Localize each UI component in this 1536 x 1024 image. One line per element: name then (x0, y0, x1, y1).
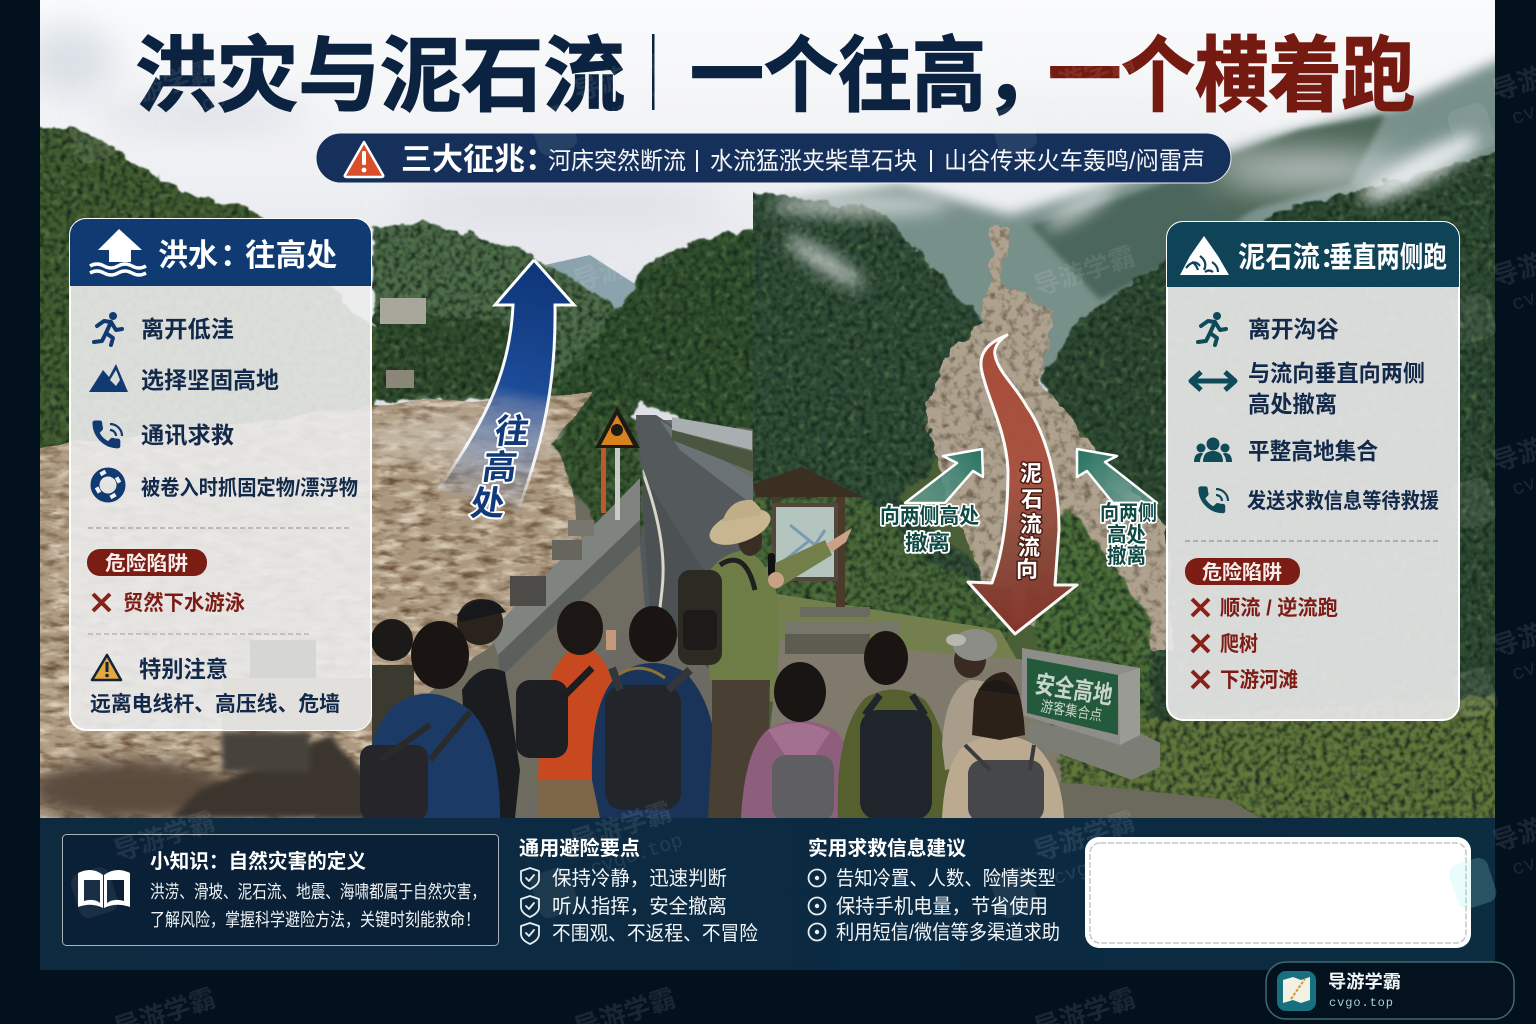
warning banner: ： (525, 142, 556, 177)
pill: danger traps (87, 549, 207, 576)
rescue info tips: 告知冷置、人数、险情类型 (836, 867, 1056, 890)
title: 一个往高 (690, 31, 986, 122)
person with cap black jacket (457, 599, 520, 818)
list item: choose solid high ground (89, 364, 279, 393)
title: 一个横着跑 (1048, 31, 1415, 122)
person purple hoodie (741, 662, 855, 821)
watermarks: cvgo.top (1051, 80, 1149, 131)
list item: leave gully (1198, 313, 1339, 345)
trap item: downstream beach: 下游河滩 (1220, 669, 1298, 692)
list item: leave gully: 离开沟谷 (1248, 316, 1339, 342)
person blue hoodie (360, 621, 500, 820)
arrow text: 高处 (1107, 523, 1146, 547)
knowledge box: 洪涝、滑坡、泥石流、地震、海啸都属于自然灾害， (150, 882, 486, 902)
arrow text (1100, 502, 1157, 568)
general safety tips: 通用避险要点 (519, 836, 640, 860)
knowledge box: 小知识：自然灾害的定义 (150, 849, 366, 873)
green arrow: evacuate left (880, 449, 983, 555)
arrow label: 往 (492, 413, 532, 451)
pill: danger traps (1185, 558, 1300, 585)
panel heading: 垂直两侧跑 (1329, 241, 1447, 274)
watermarks: 导游学霸 (1030, 241, 1138, 302)
list item: perpendicular: 高处撤离 (1248, 391, 1337, 417)
panel heading (1238, 241, 1447, 274)
arrow text: 向两侧 (1100, 502, 1157, 525)
list item: lifebuoy: 被卷入时抓固定物/漂浮物 (141, 476, 358, 500)
list item: send message (1199, 487, 1439, 513)
warning banner: 水流猛涨夹柴草石块 (710, 148, 917, 175)
trap item: downstream beach (1192, 669, 1298, 692)
person navy jacket with backpack (592, 606, 716, 818)
arrow label: 向 (1016, 557, 1038, 582)
arrow label: 石 (1021, 487, 1043, 512)
special note: 特别注意 (139, 656, 228, 682)
general safety tips: 听从指挥，安全撤离 (552, 895, 727, 918)
watermarks: cvgo.top (131, 89, 229, 140)
person grey cap beige jacket (942, 629, 1000, 770)
panel heading: 洪水 (158, 238, 218, 273)
icon: map logo (1277, 971, 1316, 1011)
arrow label: 泥 (1020, 461, 1042, 486)
list item: send message: 发送求救信息等待救援 (1247, 489, 1439, 513)
knowledge box (62, 834, 498, 946)
panel heading: ： (220, 238, 251, 273)
photo: debris flow valley scene (right half) (745, 0, 1510, 830)
brand badge (1266, 962, 1514, 1019)
arrow label: 流 (1020, 512, 1042, 537)
warning banner: 河床突然断流 (548, 148, 686, 175)
safe-high-ground stone sign (1022, 648, 1160, 780)
watermarks: cvgo.top (588, 830, 686, 882)
icon: warning triangle (345, 142, 383, 177)
list item: call for rescue (93, 421, 234, 448)
watermarks: 导游学霸 (1030, 46, 1138, 107)
brand badge: 导游学霸 (1328, 971, 1401, 992)
trap item: 贸然下水游泳 (123, 591, 245, 615)
icon: mountain with rocks (1180, 236, 1229, 275)
list item: leave low ground (94, 313, 234, 345)
pill: danger traps: 危险陷阱 (1202, 560, 1282, 584)
arrow label: 高 (480, 449, 520, 487)
panel: flood (70, 219, 372, 730)
warning banner: 山谷传来火车轰鸣/闷雷声 (944, 148, 1205, 175)
list item: leave low ground: 离开低洼 (141, 316, 234, 342)
roadside shrubs (552, 415, 640, 540)
arrow text (880, 504, 979, 555)
title: 洪灾与泥石流 (135, 31, 625, 122)
guide (678, 500, 852, 818)
arrow label: 流 (1018, 535, 1040, 560)
rescue info tips: 利用短信/微信等多渠道求助 (836, 921, 1060, 944)
safe-high-ground stone sign: 安全高地 (1033, 670, 1114, 710)
arrow text: 撤离 (905, 531, 950, 555)
watermarks: 导游学霸 (1030, 806, 1138, 867)
pill: danger traps: 危险陷阱 (105, 551, 188, 575)
warning sign on road (595, 407, 640, 520)
trap item: downstream/upstream: 顺流 / 逆流跑 (1220, 596, 1338, 620)
notice board (753, 467, 864, 612)
arrow text: 撤离 (1107, 544, 1146, 568)
special note (90, 655, 340, 716)
road (636, 415, 750, 608)
rescue info tips (808, 836, 1060, 944)
rescue info tips: 实用求救信息建议 (808, 836, 966, 860)
title (135, 31, 1415, 122)
person red jacket (516, 601, 616, 820)
panel: debris flow (1167, 222, 1459, 720)
guardrail (490, 478, 640, 655)
watermarks: cvgo.top (1051, 840, 1149, 891)
watermarks: 导游学霸 (110, 55, 218, 116)
panel heading: 往高处 (245, 238, 337, 273)
blue arrow: go high (438, 260, 574, 523)
list item: call for rescue: 通讯求救 (141, 422, 234, 448)
green arrow: evacuate right (1077, 449, 1157, 568)
photo: flood river scene (left half) (20, 0, 770, 835)
person beige hoodie backpack (942, 672, 1064, 822)
person olive jacket (838, 631, 952, 820)
special note: 远离电线杆、高压线、危墙 (90, 692, 340, 716)
watermarks: 导游学霸 (567, 796, 675, 857)
general safety tips: 保持冷静，迅速判断 (552, 867, 727, 890)
panel heading: ： (1320, 243, 1347, 273)
general safety tips: 不围观、不返程、不冒险 (552, 922, 758, 945)
list item: lifebuoy (95, 470, 358, 500)
arrow label (1016, 461, 1043, 582)
warning banner (316, 133, 1231, 183)
white blank card (1085, 837, 1471, 948)
trap item: climb tree: 爬树 (1220, 633, 1258, 656)
stone steps (785, 607, 900, 654)
icon: book (78, 870, 130, 908)
list item: gather (1194, 438, 1378, 464)
general safety tips (519, 836, 758, 945)
list item: gather: 平整高地集合 (1248, 438, 1378, 464)
person far left (371, 619, 414, 745)
list item: choose solid high ground: 选择坚固高地 (141, 367, 279, 393)
people: tourists and guide (360, 500, 1064, 822)
watermarks: 导游学霸 (110, 806, 218, 867)
list item: perpendicular (1191, 360, 1425, 417)
icon: house and water (90, 229, 146, 275)
rescue info tips: 保持手机电量，节省使用 (836, 895, 1048, 918)
red arrow: debris flow direction (968, 335, 1077, 634)
panel heading: 泥石流 (1238, 241, 1320, 274)
safe-high-ground stone sign: 游客集合点 (1039, 698, 1103, 725)
arrow label: 处 (468, 485, 508, 523)
panel heading (158, 238, 337, 273)
bottom band (40, 818, 1495, 970)
watermarks: 导游学霸 (570, 46, 678, 107)
arrow label (468, 413, 532, 523)
warning banner: 三大征兆 (401, 142, 525, 177)
watermarks: cvgo.top (591, 80, 689, 131)
watermarks: 导游学霸 (570, 236, 678, 297)
knowledge box: 了解风险，掌握科学避险方法，关键时刻能救命！ (150, 910, 480, 930)
title: ， (984, 32, 1064, 121)
list item: perpendicular: 与流向垂直向两侧 (1248, 360, 1425, 386)
trap item: climb tree (1192, 633, 1258, 656)
arrow text: 向两侧高处 (880, 504, 979, 528)
brand badge: cvgo.top (1329, 996, 1393, 1010)
